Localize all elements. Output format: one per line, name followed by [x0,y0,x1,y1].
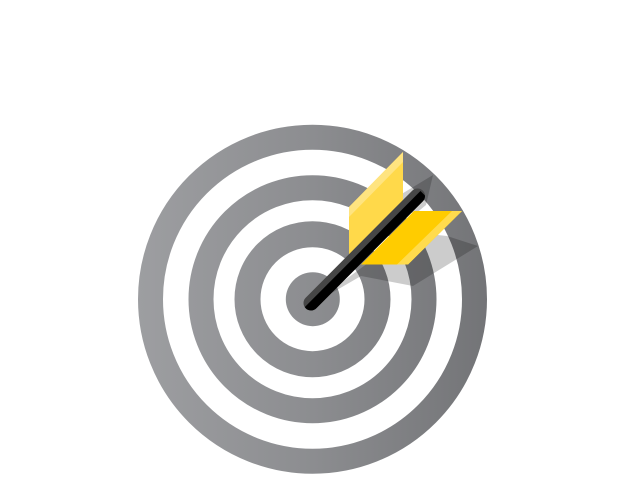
upper flight [349,152,403,256]
lower flight [361,211,462,264]
dart shadow [311,175,478,305]
dart shaft [307,194,424,312]
target rings [150,137,474,461]
target with dart illustration [138,124,487,474]
